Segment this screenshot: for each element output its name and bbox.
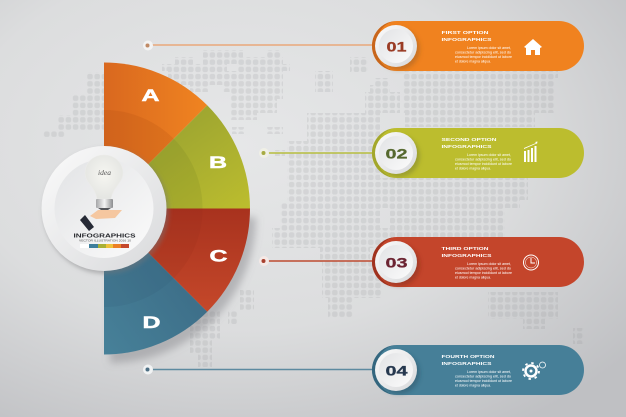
panel: option 2	[372, 128, 584, 178]
segment C	[104, 208, 250, 312]
connector line D	[143, 364, 374, 374]
number badge	[375, 25, 417, 67]
body text: et dolore magna aliqua.	[455, 60, 491, 64]
segment D	[104, 208, 207, 354]
body text: eiusmod tempor incididunt ut labore	[455, 271, 512, 275]
body text: et dolore magna aliqua.	[455, 276, 491, 280]
heading: INFOGRAPHICS	[442, 253, 492, 258]
icon: house	[524, 39, 542, 55]
logo subtitle: VECTOR ILLUSTRATION 2016 10	[79, 238, 132, 242]
number badge: 02	[386, 146, 408, 162]
logo colour bar	[80, 244, 129, 248]
body text: Lorem ipsum dolor sit amet,	[467, 370, 511, 374]
icon: light bulb: idea	[98, 168, 111, 177]
body text: et dolore magna aliqua.	[455, 384, 491, 388]
segment B: B	[209, 153, 227, 172]
body text: et dolore magna aliqua.	[455, 166, 491, 170]
heading: SECOND OPTION	[442, 137, 496, 142]
heading: FIRST OPTION	[442, 30, 488, 35]
connector line A	[143, 40, 374, 50]
dotted world map	[43, 50, 584, 367]
center disc	[42, 146, 169, 274]
body text: consectetur adipiscing elit, sed do	[455, 374, 511, 378]
panel: option 3	[372, 237, 584, 287]
body text: Lorem ipsum dolor sit amet,	[467, 262, 511, 266]
icon: gears	[523, 362, 546, 379]
body text: consectetur adipiscing elit, sed do	[455, 50, 511, 54]
logo text: INFOGRAPHICS	[74, 234, 136, 240]
body text: consectetur adipiscing elit, sed do	[455, 266, 511, 270]
body text: eiusmod tempor incididunt ut labore	[455, 162, 512, 166]
segment D: D	[142, 313, 160, 332]
number badge: 04	[386, 362, 408, 378]
segment A	[104, 62, 207, 208]
body text: Lorem ipsum dolor sit amet,	[467, 153, 511, 157]
number badge: 01	[386, 38, 407, 54]
icon: hand	[80, 210, 122, 231]
number badge	[375, 349, 417, 391]
icon: clock	[524, 255, 538, 270]
heading: INFOGRAPHICS	[442, 361, 492, 366]
heading: FOURTH OPTION	[442, 354, 494, 359]
connector line C	[259, 256, 374, 266]
heading: THIRD OPTION	[442, 246, 488, 251]
segment C: C	[210, 246, 228, 266]
body text: eiusmod tempor incididunt ut labore	[455, 55, 512, 59]
panel: option 4	[372, 345, 584, 395]
number badge: 03	[386, 254, 408, 270]
panel: option 1	[372, 21, 584, 71]
icon: growth chart	[524, 142, 538, 162]
segment B	[104, 105, 250, 208]
body text: Lorem ipsum dolor sit amet,	[467, 46, 511, 50]
heading: INFOGRAPHICS	[442, 144, 492, 149]
number badge	[375, 241, 417, 283]
heading: INFOGRAPHICS	[442, 37, 492, 42]
fan shadow	[110, 217, 256, 363]
connector line B	[259, 148, 374, 158]
segment A: A	[142, 86, 160, 105]
body text: eiusmod tempor incididunt ut labore	[455, 379, 512, 383]
body text: consectetur adipiscing elit, sed do	[455, 158, 511, 162]
number badge	[375, 132, 417, 174]
